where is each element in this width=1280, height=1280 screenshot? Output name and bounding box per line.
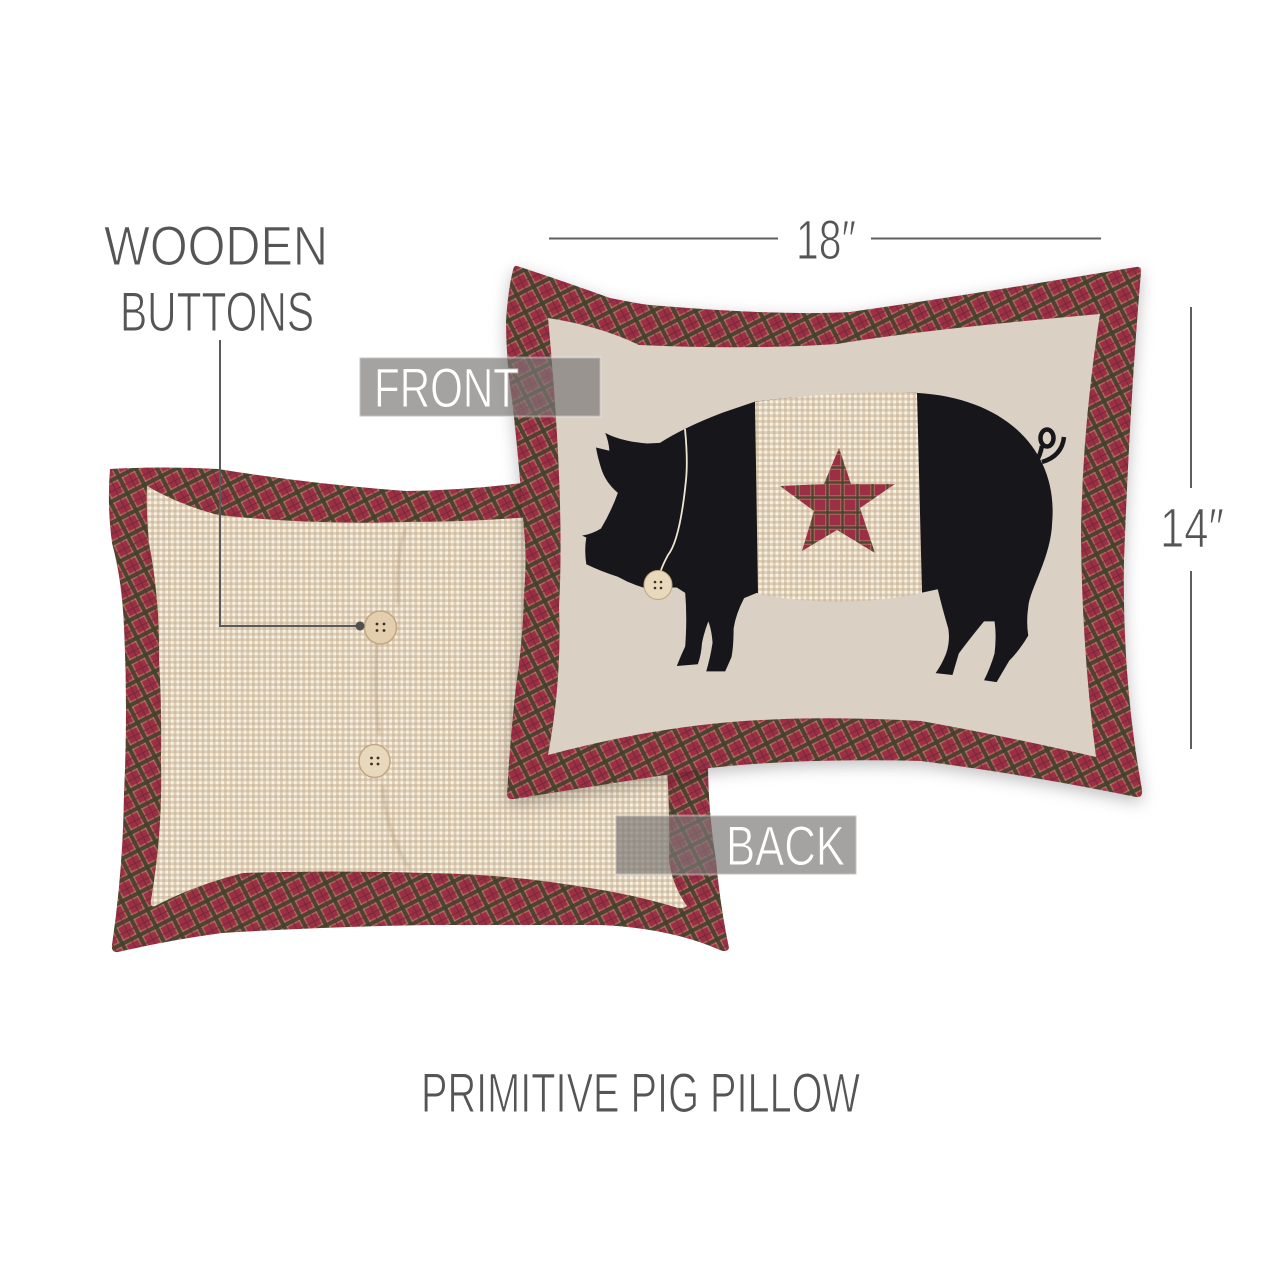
- height dimension: 14 inches: 14″: [1160, 496, 1224, 559]
- gingham belly stripe: [755, 392, 922, 602]
- label: front: FRONT: [374, 356, 519, 419]
- front pillow: [506, 266, 1142, 799]
- plaid star: [780, 448, 895, 553]
- back pillow: [109, 468, 729, 952]
- front pillow beige panel: [548, 314, 1100, 757]
- label: back: BACK: [726, 814, 845, 877]
- title: PRIMITIVE PIG PILLOW: [421, 1061, 860, 1124]
- wooden button upper: [364, 611, 396, 644]
- pig tail: [1036, 430, 1064, 462]
- front wooden button: [644, 570, 672, 600]
- front pillow plaid flange: [506, 266, 1142, 799]
- label: back: [616, 814, 856, 877]
- width dimension: 18 inches: 18″: [796, 208, 856, 271]
- callout: wooden buttons: WOODEN: [104, 214, 328, 277]
- back pillow placket seam: [376, 528, 409, 868]
- back pillow gingham panel: [147, 486, 687, 908]
- callout: wooden buttons: [104, 214, 328, 343]
- wooden button lower: [359, 744, 390, 778]
- button string: [660, 429, 687, 575]
- callout: wooden buttons: BUTTONS: [120, 280, 314, 343]
- back pillow plaid flange: [109, 468, 729, 952]
- pig silhouette: [582, 393, 1053, 682]
- leader line to wooden button: [220, 340, 364, 630]
